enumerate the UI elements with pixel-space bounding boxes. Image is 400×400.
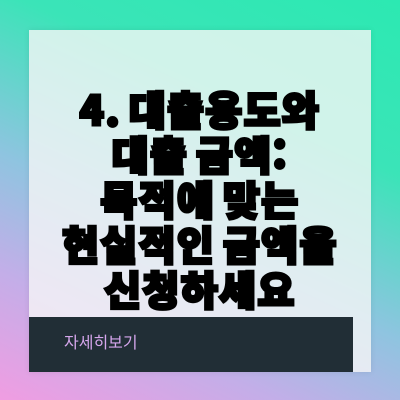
title: 현실적인 금액을	[62, 214, 338, 272]
panel: translucent card	[29, 30, 371, 372]
title: 신청하세요	[104, 259, 296, 317]
title: 대출 금액:	[112, 124, 288, 182]
title	[62, 79, 338, 317]
panel: dark call-to-action bar	[29, 317, 353, 372]
title: 4. 대출용도와	[80, 79, 320, 137]
link text: 자세히보기	[64, 329, 138, 353]
title: 목적에 맞는	[100, 169, 300, 227]
